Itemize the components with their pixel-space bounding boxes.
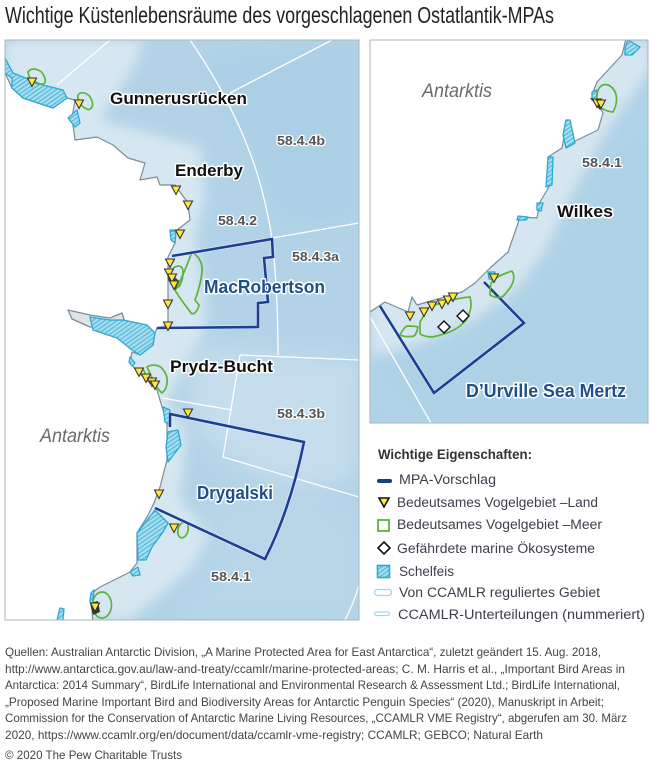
legend item: CCAMLR regulated area: Von CCAMLR reguliertes Gebiet bbox=[399, 585, 600, 600]
panel: left map bbox=[0, 30, 359, 625]
legend item: bird area sea: Bedeutsames Vogelgebiet –Meer bbox=[397, 517, 603, 532]
Amery peninsula rock bbox=[68, 310, 125, 327]
MPA proposal: MacRobertson bbox=[157, 239, 273, 328]
Antarctic land bbox=[6, 74, 191, 620]
label: Gunnerusrücken: Gunnerusrücken bbox=[110, 89, 247, 108]
legend item: ice shelf: Schelfeis bbox=[399, 564, 454, 579]
legend bbox=[374, 446, 645, 622]
important bird areas: marine bbox=[28, 69, 202, 618]
ice shelves bbox=[5, 58, 181, 620]
label: Enderby: Enderby bbox=[175, 161, 244, 180]
copyright: © 2020 The Pew Charitable Trusts bbox=[5, 748, 182, 762]
label: MacRobertson: MacRobertson bbox=[204, 277, 325, 297]
sources text block: Commission for the Conservation of Antarctic Marine Living Resources, „CCAMLR VME Registry“, abgerufen am 30. März bbox=[5, 711, 627, 725]
label: 58.4.3b: 58.4.3b bbox=[277, 406, 325, 421]
label: Antarktis: Antarktis bbox=[421, 81, 492, 102]
sources text block: Antarctica: 2014 Summary“, BirdLife International and Environmental Research & Assessment Ltd.; BirdLife International, bbox=[5, 678, 620, 692]
legend item: bird area land: Bedeutsames Vogelgebiet –Land bbox=[397, 495, 598, 510]
sources text block: Quellen: Australian Antarctic Division, „A Marine Protected Area for East Antarctica“, zuletzt geändert 15. Aug. 2018, bbox=[5, 645, 601, 659]
label: 58.4.4b: 58.4.4b bbox=[277, 133, 325, 148]
legend item: MPA proposal: MPA-Vorschlag bbox=[399, 472, 496, 487]
sources text block bbox=[5, 645, 627, 742]
important bird areas: marine bbox=[400, 85, 617, 337]
MPA proposal: Drygalski bbox=[155, 414, 304, 559]
label: Antarktis: Antarktis bbox=[39, 426, 110, 447]
important bird areas: land bbox=[28, 78, 192, 615]
vulnerable marine ecosystems bbox=[438, 310, 469, 333]
sources text block: http://www.antarctica.gov.au/law-and-treaty/ccamlr/marine-protected-areas; C. M. Harris et al., „Important Bird Areas in bbox=[5, 662, 625, 676]
label: Wilkes: Wilkes bbox=[557, 202, 613, 221]
legend item: vulnerable marine ecosystems: Gefährdete marine Ökosysteme bbox=[397, 541, 595, 556]
legend heading: Wichtige Eigenschaften: bbox=[378, 446, 532, 462]
label: 58.4.3a: 58.4.3a bbox=[292, 249, 340, 264]
sources text block: 2020, https://www.ccamlr.org/en/document/data/ccamlr-vme-registry; CCAMLR; GEBCO; Natural Earth bbox=[5, 728, 543, 742]
MPA proposal: D'Urville Sea Mertz bbox=[380, 282, 524, 393]
label: D'Urville Sea Mertz: D’Urville Sea Mertz bbox=[466, 381, 626, 401]
important bird areas: land bbox=[406, 98, 606, 320]
legend item: CCAMLR subdivisions: CCAMLR-Unterteilungen (nummeriert) bbox=[398, 607, 645, 622]
CCAMLR subdivision line bbox=[370, 317, 431, 423]
label: 58.4.1: 58.4.1 bbox=[211, 569, 251, 584]
sources text block: „Proposed Marine Important Bird and Biodiversity Areas for Antarctic Penguin Species“ (2020), Manuskript in Arbeit; bbox=[5, 695, 604, 709]
label: 58.4.2: 58.4.2 bbox=[218, 213, 257, 228]
Antarctic land bbox=[365, 30, 628, 314]
ice shelves bbox=[488, 40, 640, 280]
CCAMLR subdivision lines bbox=[57, 40, 359, 620]
label: Drygalski: Drygalski bbox=[197, 483, 273, 503]
label: Prydz-Bucht: Prydz-Bucht bbox=[170, 357, 273, 376]
panel: right map bbox=[365, 30, 650, 423]
label: 58.4.1: 58.4.1 bbox=[582, 155, 622, 170]
